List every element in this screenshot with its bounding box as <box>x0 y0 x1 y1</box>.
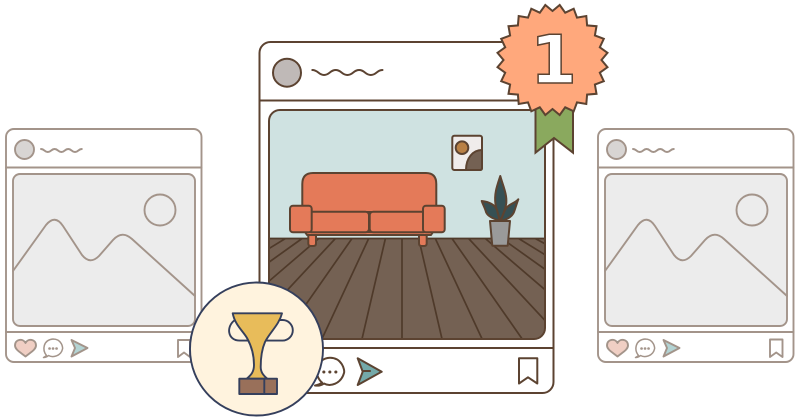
username squiggle <box>312 70 383 75</box>
panel: right post card <box>598 129 794 362</box>
award badge <box>498 5 608 153</box>
trophy <box>229 313 293 394</box>
heart icon <box>277 362 305 384</box>
number one: 1 <box>530 21 577 99</box>
room image <box>270 111 544 338</box>
trophy medallion <box>190 282 323 416</box>
send icon <box>358 358 382 385</box>
wall picture <box>452 136 482 170</box>
wall <box>269 110 545 239</box>
ribbon <box>536 105 573 153</box>
potted plant <box>482 176 518 246</box>
bookmark icon <box>519 358 537 384</box>
panel: left post card <box>6 129 202 362</box>
rosette <box>498 5 608 115</box>
avatar <box>273 59 301 87</box>
panel: main post card <box>258 41 554 394</box>
comment icon <box>315 358 344 386</box>
sofa <box>290 173 445 246</box>
wooden floor <box>270 238 544 338</box>
